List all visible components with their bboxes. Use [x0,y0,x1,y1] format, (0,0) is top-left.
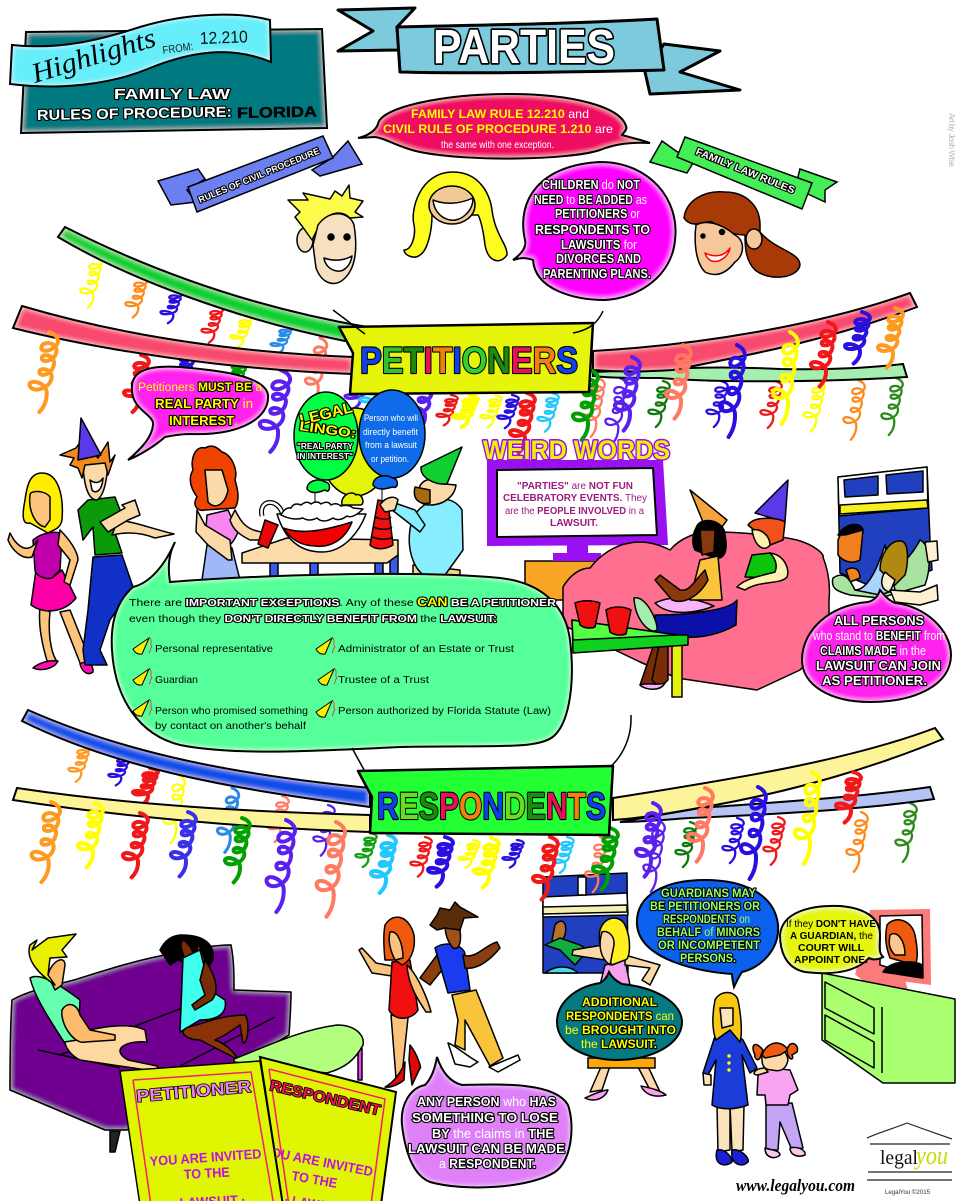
decorative ribbons: lower left [13,710,370,832]
character: blond man face [288,185,363,283]
purple couch with two people [10,934,291,1152]
exceptions list: Person authorized by Florida Statute (Law) [338,705,551,717]
character: blonde woman face [404,172,507,261]
speech bubble: appoint guardian [780,906,883,973]
speech bubble: children: PETITIONERS or [555,207,640,221]
ribbon: rules of civil procedure [158,136,362,212]
balloons: legal lingo: from a lawsuit [365,440,417,450]
speech bubble: all persons: ALL PERSONS [834,613,924,628]
character: bearded man in green party hat [380,447,463,580]
balloons: legal lingo: Person who will [364,413,418,423]
invitation: respondent: TO THE [290,1168,338,1191]
header panel: highlights: FROM: [162,41,194,57]
logo: LegalYou [867,1123,952,1196]
header panel: highlights: 12.210 [199,27,248,48]
speech bubble: children: CHILDREN do NOT [542,178,640,192]
speech bubble: children: PARENTING PLANS. [543,267,651,281]
speech bubble: additional respondents: the LAWSUIT. [581,1037,657,1051]
balloons: legal lingo: "REAL PARTY [297,442,354,451]
TV: weird words: are the PEOPLE INVOLVED in a [505,506,644,517]
speech bubble: guardians: GUARDIANS MAY [661,888,756,900]
banner: petitioners: PETITIONERS [360,340,578,381]
balloons: legal lingo: directly benefit [363,427,418,437]
speech bubble: appoint guardian: APPOINT ONE. [794,954,868,966]
pink couch with two people [563,480,829,690]
speech bubble: real party in interest: Petitioners MUST BE a [138,382,263,394]
speech bubble: guardians: PERSONS. [680,953,736,965]
balloons: legal lingo: LEGAL [298,399,354,429]
speech bubble: children: LAWSUITS for [561,238,637,252]
speech bubble: any person [402,1057,572,1187]
speech bubble: rule 12.210: the same with one exception. [441,140,554,151]
invitation: petitioner: PETITIONER [136,1077,252,1106]
man on couch [655,480,788,637]
header panel: highlights: FLORIDA [237,104,317,122]
speech bubble: children: NEED to BE ADDED as [534,193,647,207]
speech bubble: appoint guardian: COURT WILL [798,942,865,954]
speech bubble: real party in interest: INTEREST . [169,414,238,428]
logo: LegalYou: legal [880,1147,918,1169]
character: man in green shirt pointing [60,418,174,665]
TV: weird words: WEIRD WORDS [483,435,670,465]
invitation: respondent: YOU ARE INVITED [261,1143,374,1179]
exceptions intro text [129,595,556,625]
streamers behind lower ribbons [68,745,917,893]
exceptions list: Person who promised something [155,705,308,717]
decorative ribbons: upper right [593,293,917,381]
speech bubble: all persons: LAWSUIT CAN JOIN [816,658,941,673]
speech bubble: any person: LAWSUIT CAN BE MADE [408,1142,565,1156]
logo: LegalYou: you [913,1141,948,1170]
balloons: legal lingo: or petition. [371,454,409,464]
speech bubble: all persons: AS PETITIONER. [822,673,927,688]
ribbon: family law rules: FAMILY LAW RULES [694,147,797,197]
exceptions list [133,638,551,732]
credit: art by Josh Wise: Art by Josh Wise [947,113,956,168]
speech bubble: any person: BY the claims in THE [432,1127,554,1141]
balloons: legal lingo: LINGO: [299,418,357,441]
invitation: petitioner: YOU ARE INVITED [149,1146,262,1169]
balloons: legal lingo: IN INTEREST" [297,452,353,461]
speech bubble: children: RESPONDENTS TO [535,223,650,237]
blond man on couch [29,934,160,1072]
character: mother in blue suit [703,992,757,1165]
decorative ribbons: upper left [13,227,367,374]
exceptions list: Trustee of a Trust [338,674,429,686]
ribbon: rules of civil procedure: RULES OF CIVIL PROCEDURE [197,146,321,205]
speech bubble: appoint guardian: A GUARDIAN, the [790,930,873,942]
character: woman pushing, yellow hair [572,918,666,1100]
balloons: legal lingo [294,390,425,505]
banner: respondents: RESPONDENTS [377,786,606,828]
decorative ribbons: lower right [613,728,943,822]
exceptions list: by contact on another's behalf [155,720,306,732]
title banner: parties [338,8,740,94]
header panel: highlights: RULES OF PROCEDURE: [37,105,232,124]
speech bubble: additional respondents: be BROUGHT INTO [565,1023,676,1037]
invitation: respondent: RESPONDENT [268,1077,382,1119]
speech bubble: children: DIVORCES AND [556,252,641,266]
banner: petitioners [333,310,603,394]
header panel: highlights [10,15,327,133]
speech bubble: rule 12.210: FAMILY LAW RULE 12.210 and [411,107,589,121]
character: blonde woman in pink dress [8,473,93,674]
green table with red cups [572,601,688,697]
speech bubble: guardians [637,880,778,987]
character: child with orange pigtails [753,1043,805,1158]
character: brunette woman face [684,192,800,277]
ribbon: family law rules [650,137,837,209]
shoes on table [634,598,657,631]
speech bubble: rule 12.210 [358,94,650,159]
streamers in front of upper ribbons [30,308,903,453]
exceptions intro text: even though they DON'T DIRECTLY BENEFIT FROM the LAWSUIT: [129,613,497,625]
woman on couch [160,935,248,1058]
TV: weird words: CELEBRATORY EVENTS. They [503,493,647,504]
invitation: petitioner [120,1061,284,1201]
green oval table [234,1025,363,1080]
speech bubble: additional respondents [557,972,682,1068]
speech bubble: guardians: RESPONDENTS on [663,914,750,926]
TV: weird words: "PARTIES" are NOT FUN [517,481,633,492]
speech bubble: any person: a RESPONDENT. [439,1157,536,1171]
website url: www.legalyou.com [736,1176,855,1195]
speech bubble: important exceptions [112,542,572,752]
streamers behind upper ribbons [80,257,903,452]
character: woman in red dress dancing [359,917,431,1087]
speech bubble: real party in interest [128,367,268,460]
exceptions list: Guardian [155,674,198,686]
speech bubble: any person: ANY PERSON who HAS [417,1095,556,1109]
exceptions list: Personal representative [155,643,273,655]
banner: respondents [352,715,631,835]
speech bubble: appoint guardian: If they DON'T HAVE [786,918,876,930]
speech bubble: guardians: BEHALF of MINORS [657,927,760,939]
speech bubble: all persons [802,590,951,702]
punch table with bowl and cups [242,500,398,583]
header panel: highlights: Highlights [27,23,160,90]
header panel: highlights: FAMILY LAW [114,86,231,103]
exceptions intro text: There are IMPORTANT EXCEPTIONS . Any of these CAN BE A PETITIONER [129,595,556,609]
window with people falling in [832,467,938,605]
speech bubble: guardians: BE PETITIONERS OR [650,901,761,913]
speech bubble: children [513,162,676,300]
streamers in front of lower ribbons [32,772,861,917]
character: redhead woman serving punch [190,446,278,580]
speech bubble: additional respondents: RESPONDENTS can [566,1009,674,1023]
logo: LegalYou: LegalYou ©2015 [885,1189,931,1196]
exceptions list: Administrator of an Estate or Trust [338,643,514,655]
speech bubble: any person: SOMETHING TO LOSE [412,1111,558,1125]
TV: weird words [483,435,670,600]
speech bubble: real party in interest: REAL PARTY in [155,397,253,411]
speech bubble: all persons: CLAIMS MADE in the [820,643,926,658]
TV: weird words: LAWSUIT. [550,518,598,529]
speech bubble: additional respondents: ADDITIONAL [582,995,657,1009]
speech bubble: guardians: OR INCOMPETENT [658,940,760,952]
woman on couch [640,490,727,689]
speech bubble: rule 12.210: CIVIL RULE OF PROCEDURE 1.210 are [383,122,613,136]
title banner: parties: PARTIES [433,21,615,74]
character: man in blue shirt dancing [420,902,520,1072]
judge desk and monitor [822,909,955,1083]
window with man falling [543,873,628,973]
invitation: petitioner: TO THE [183,1165,230,1182]
invitation: respondent [260,1057,396,1201]
speech bubble: all persons: who stand to BENEFIT from [812,628,945,643]
